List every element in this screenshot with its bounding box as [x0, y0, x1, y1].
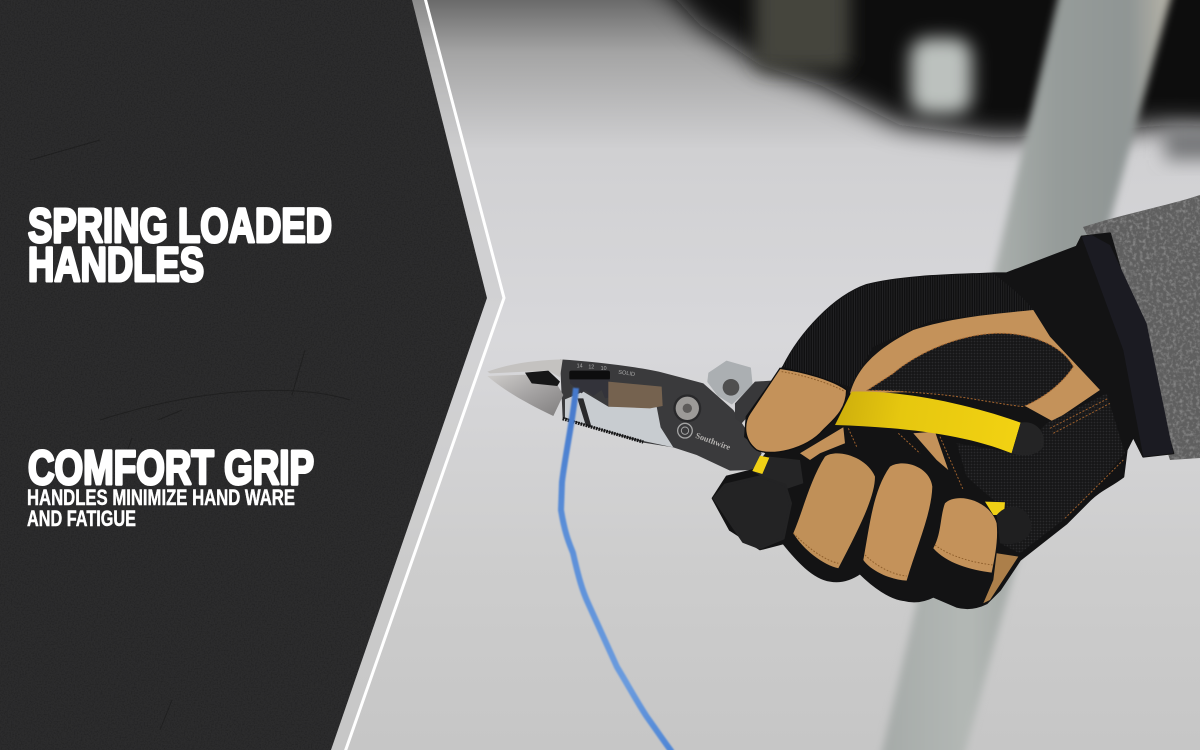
- text: comfort grip description: HANDLES MINIMIZE HAND WARE: [27, 485, 295, 510]
- pivot screw: [673, 394, 701, 422]
- cuff band: [1082, 235, 1173, 457]
- index finger pad: [793, 453, 875, 568]
- pliers: [487, 359, 772, 471]
- text: comfort grip description: AND FATIGUE: [27, 506, 136, 531]
- yellow grip neck: [752, 456, 769, 474]
- yellow handle: [835, 392, 1021, 453]
- ring finger pad: [933, 498, 997, 573]
- lower end cap: [997, 507, 1032, 544]
- tan wrist sliver: [983, 553, 1018, 603]
- wire gauge labels: SOLID: [618, 370, 635, 378]
- gloved hand gripping handle: [713, 233, 1173, 608]
- silver cam: [708, 362, 752, 403]
- light strip beside the panel: [331, 0, 505, 750]
- finger stitching: [782, 372, 993, 576]
- heading: spring loaded handles: HANDLES: [28, 239, 204, 292]
- white chevron line: [345, 0, 504, 750]
- thumb: [746, 368, 847, 452]
- serrated edge: [563, 419, 643, 442]
- wire gauge labels: 12: [588, 364, 594, 370]
- text: comfort grip description: [27, 485, 295, 531]
- wire gauge labels: 10: [601, 366, 607, 372]
- stripping slot: [569, 371, 610, 380]
- tan palm: [850, 310, 1100, 422]
- glove silhouette: [713, 233, 1173, 608]
- wire gauge labels: [577, 364, 635, 378]
- lower palm texture: [957, 393, 1125, 553]
- stripper notches: [570, 379, 610, 398]
- back of glove mesh: [783, 273, 1033, 387]
- heading: spring loaded handles: SPRING LOADED: [28, 200, 332, 253]
- southwire logo: [678, 423, 732, 452]
- jaw teeth gap: [525, 371, 560, 386]
- heading: comfort grip: COMFORT GRIP: [28, 442, 314, 495]
- blue wire: [561, 388, 672, 750]
- sleeve: [1080, 190, 1200, 465]
- rear jaw lever: [735, 381, 772, 423]
- rubber pinky tip: [714, 477, 791, 548]
- southwire logo: Southwire: [694, 431, 732, 452]
- lower jaw: [487, 375, 563, 416]
- upper jaw: [487, 359, 563, 377]
- pliers body: [560, 359, 762, 471]
- wire gauge labels: 14: [577, 364, 583, 370]
- cutter blade: [565, 392, 673, 447]
- tan inner palm patches: [800, 427, 948, 470]
- heading: spring loaded handles: [28, 200, 332, 292]
- left dark panel: [0, 0, 490, 750]
- blade shadow: [577, 398, 592, 427]
- background pole: [880, 0, 1173, 750]
- stitch lines: [848, 398, 1123, 518]
- lower yellow handle: [985, 502, 1005, 515]
- middle finger pad: [863, 463, 932, 581]
- textured palm pad: [867, 333, 1073, 407]
- copper wear area: [608, 382, 663, 408]
- handle end cap: [1012, 422, 1044, 455]
- lower grip: [753, 457, 803, 490]
